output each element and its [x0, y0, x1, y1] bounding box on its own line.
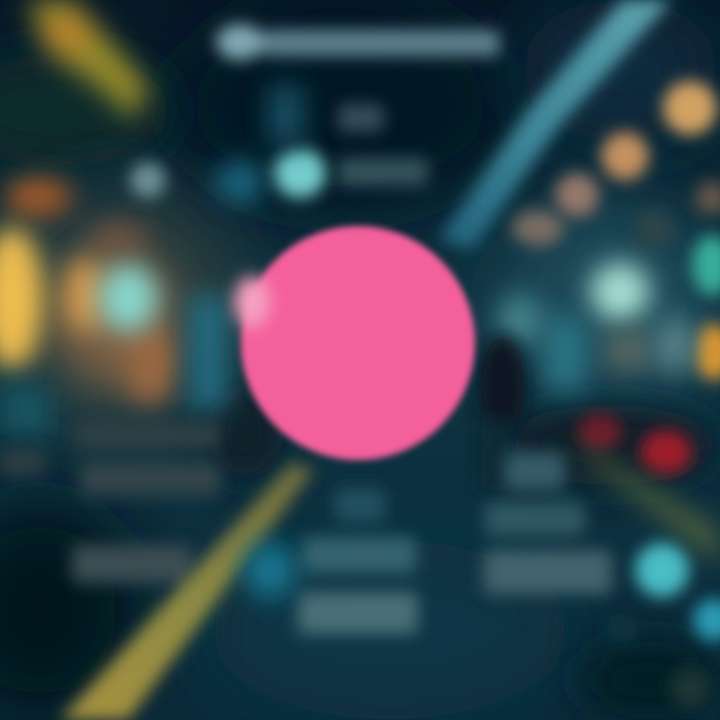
teal diagonal beam [438, 0, 672, 250]
bottom right blurred text [484, 452, 612, 594]
left blurred text rows [0, 422, 220, 583]
yellow sign stripe, top left [28, 0, 148, 120]
cyan dots, bottom [244, 542, 720, 708]
right road stripe [575, 450, 720, 565]
upper left dots [130, 85, 326, 202]
red lights [578, 414, 692, 474]
right side lights [498, 81, 720, 390]
pink circle [234, 226, 475, 460]
bottom centre blurred text [298, 488, 418, 634]
left shop lights [0, 177, 228, 435]
title, blurred [216, 24, 500, 60]
dark figure [478, 335, 526, 490]
subtitle, blurred [338, 104, 428, 186]
yellow road stripe [60, 462, 314, 720]
